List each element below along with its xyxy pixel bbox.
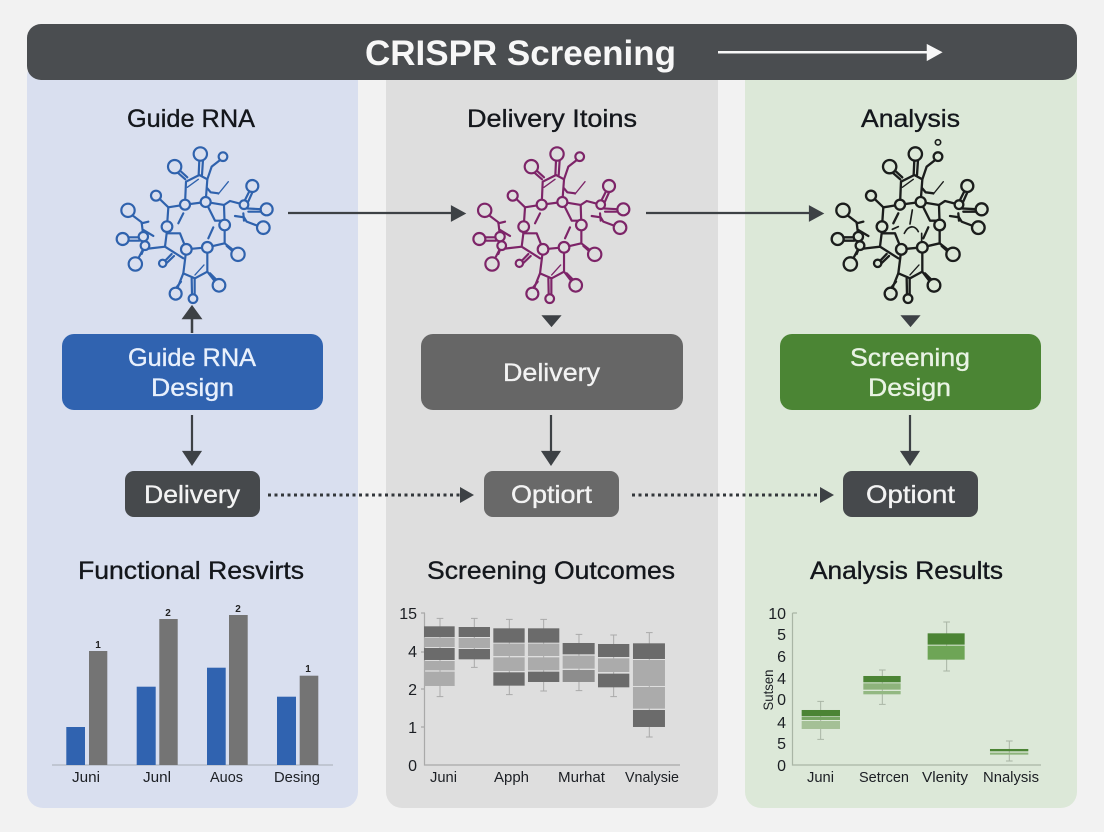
box: Guide RNA Design: Guide RNA: [128, 344, 256, 372]
bar chart: functional results: Junl: [143, 769, 171, 786]
dotted arrow: option to option: [632, 487, 834, 503]
box plot: analysis results: 10: [768, 606, 786, 623]
panel background: grey: [386, 60, 718, 808]
arrow: small down marker: [543, 316, 560, 326]
box: Guide RNA Design: [62, 334, 323, 410]
box plot: analysis results: 0: [777, 692, 786, 709]
bar chart: functional results: Juni: [72, 769, 100, 786]
panel: guide RNA column: [27, 60, 358, 808]
bar chart: functional results: Auos: [210, 769, 243, 786]
box plot: analysis results: [760, 606, 1041, 786]
box plot: screening outcomes: Murhat: [558, 769, 606, 786]
box plot: analysis results: 5: [777, 736, 786, 753]
box: Screening Design: [780, 334, 1041, 410]
box plot: screening outcomes: 15: [399, 606, 417, 623]
dotted arrow: delivery to option: [268, 487, 474, 503]
heading: Analysis Results: Analysis Results: [810, 557, 1003, 585]
bar chart: functional results: 1: [95, 640, 101, 651]
arrow: design to option: [902, 415, 918, 464]
heading: Guide RNA: Guide RNA: [127, 105, 255, 133]
box plot: screening outcomes: [399, 606, 680, 786]
box plot: screening outcomes: Juni: [430, 769, 457, 786]
box plot: analysis results: 0: [777, 758, 786, 775]
box: Screening Design: Screening: [850, 344, 970, 372]
box: Delivery: Delivery: [144, 481, 241, 509]
box: Delivery: Delivery: [503, 359, 601, 387]
box plot: analysis results: 4: [777, 671, 786, 688]
arrow: banner: [718, 46, 940, 59]
title banner: [27, 24, 1077, 80]
box plot: screening outcomes: 0: [408, 758, 417, 775]
bar chart: functional results: 1: [305, 664, 311, 675]
box: Delivery: [421, 334, 683, 410]
box plot: analysis results: Nnalysis: [983, 769, 1039, 786]
heading: Analysis: Analysis: [861, 105, 960, 133]
arrow: design to delivery: [184, 415, 200, 464]
box plot: analysis results: Vlenity: [922, 769, 969, 786]
box plot: analysis results: 4: [777, 715, 786, 732]
box: Optiont: Optiont: [866, 481, 955, 509]
panel: delivery column: [386, 60, 718, 808]
panel background: green: [745, 60, 1077, 808]
arrow: molecule 1 to molecule 2: [288, 207, 464, 220]
heading: Delivery Itoins: Delivery Itoins: [467, 105, 637, 133]
box plot: analysis results: 5: [777, 627, 786, 644]
bar chart: functional results: [52, 604, 333, 786]
box: Guide RNA Design: Design: [151, 374, 234, 402]
panel: analysis column: [745, 60, 1077, 808]
box: Optiort: Optiort: [511, 481, 592, 509]
box plot: analysis results: Sutsen: [760, 670, 776, 710]
box plot: screening outcomes: 4: [408, 644, 417, 661]
bar chart: functional results: 2: [165, 608, 171, 619]
icon: blue RNA molecule: [117, 147, 273, 303]
box: Optiort: [484, 471, 619, 517]
arrow: delivery to option: [543, 415, 559, 464]
box plot: analysis results: Juni: [807, 769, 834, 786]
arrow: molecule 2 to molecule 3: [646, 207, 822, 220]
bar chart: functional results: 2: [235, 604, 241, 615]
box plot: screening outcomes: Vnalysie: [625, 769, 679, 786]
box plot: screening outcomes: 2: [408, 682, 417, 699]
box plot: analysis results: Setrcen: [859, 769, 909, 786]
box: Screening Design: Design: [868, 374, 951, 402]
box plot: analysis results: 6: [777, 649, 786, 666]
icon: black molecule: [832, 140, 988, 303]
panel background: blue: [27, 60, 358, 808]
heading: Screening Outcomes: Screening Outcomes: [427, 557, 675, 585]
arrow: up to molecule: [184, 307, 200, 333]
box: Delivery: [125, 471, 260, 517]
icon: magenta molecule: [473, 147, 629, 303]
box: Optiont: [843, 471, 978, 517]
heading: Functional Resvirts: Functional Resvirts: [78, 557, 304, 585]
title text: CRISPR Screening: [365, 34, 676, 73]
bar chart: functional results: Desing: [274, 769, 320, 786]
box plot: screening outcomes: 1: [408, 720, 417, 737]
arrow: small down marker: [902, 316, 919, 326]
box plot: screening outcomes: Apph: [494, 769, 529, 786]
